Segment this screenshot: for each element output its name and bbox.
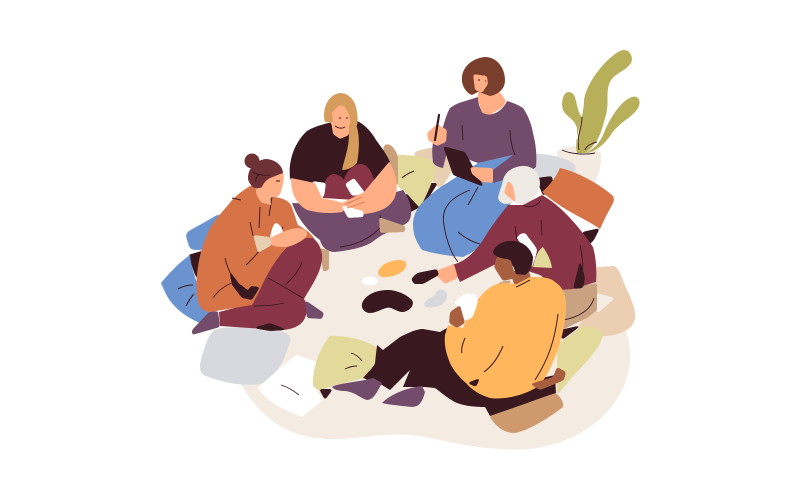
pillow: yellow — [398, 155, 435, 208]
man: yellow sweater — [332, 241, 603, 433]
plant — [557, 50, 640, 186]
ponytail — [342, 124, 359, 170]
woman: white hair, maroon sweater — [411, 166, 597, 330]
pillows: blue left — [161, 212, 222, 323]
tan behind — [488, 280, 512, 300]
woman: blonde — [290, 93, 411, 272]
pillow: tan bottom — [490, 392, 563, 433]
forearm — [225, 235, 285, 290]
hair — [498, 166, 540, 205]
black piece in hand — [411, 269, 439, 284]
socks — [332, 378, 382, 400]
face — [494, 256, 516, 281]
trousers — [219, 236, 322, 330]
pillow: yellow centre — [313, 336, 377, 400]
hair — [248, 159, 283, 188]
woman: orange hoodie — [192, 154, 324, 335]
trousers — [292, 190, 411, 252]
hand on clipboard — [470, 167, 493, 183]
skirt — [413, 155, 516, 257]
plant leaves — [562, 92, 582, 153]
neck — [331, 120, 350, 139]
plant pot — [557, 146, 601, 186]
hand holding cloth — [455, 294, 478, 320]
shirt and white cloth — [253, 235, 272, 253]
trousers — [363, 328, 556, 416]
woman: brown hair with clipboard — [413, 57, 536, 262]
white cloth — [312, 181, 326, 197]
floor objects — [362, 260, 447, 313]
yellow oval — [378, 260, 406, 277]
sock — [379, 217, 405, 233]
knees — [323, 164, 376, 200]
black blob — [362, 290, 413, 313]
back pillows right — [412, 147, 614, 246]
back hand — [530, 367, 566, 390]
pillow: tan lower right — [578, 266, 635, 336]
hands — [270, 228, 307, 247]
socks — [192, 311, 220, 335]
neck and face — [478, 92, 506, 115]
pillow: orange — [542, 168, 614, 229]
arms — [291, 178, 350, 213]
hoodie — [196, 185, 314, 312]
neck — [510, 268, 531, 287]
sweater — [445, 277, 566, 398]
pillow: white — [258, 355, 323, 417]
face — [504, 180, 516, 203]
pillow: grey — [200, 327, 290, 385]
clipboard — [443, 146, 484, 187]
inner dark — [229, 270, 260, 300]
hand — [433, 264, 458, 284]
hair — [493, 241, 533, 275]
hair — [324, 93, 358, 128]
hand with pen — [427, 124, 447, 146]
pillow: yellow right — [557, 326, 603, 394]
neck and face — [256, 172, 284, 205]
face — [328, 104, 352, 132]
pillows behind blonde woman — [383, 143, 438, 215]
sweater — [432, 97, 536, 183]
grey blob — [424, 289, 447, 308]
white oval — [362, 276, 378, 286]
sweater — [452, 195, 596, 290]
t-shirt — [290, 121, 390, 190]
tan trousers — [560, 283, 597, 330]
hair — [462, 57, 505, 96]
white patch — [517, 233, 537, 267]
rug — [237, 205, 630, 450]
